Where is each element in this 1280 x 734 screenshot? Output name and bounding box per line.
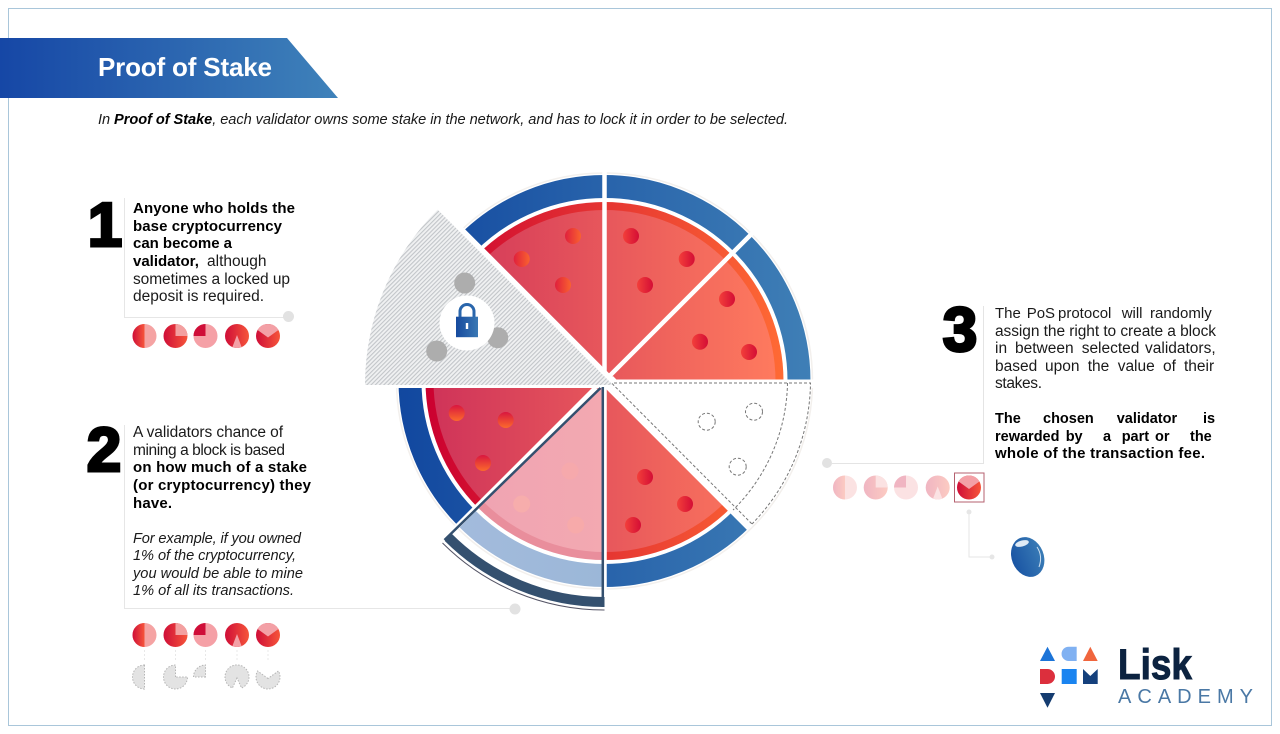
title banner: Proof of Stake xyxy=(98,52,272,82)
step 2 text: 1% of the cryptocurrency, xyxy=(133,548,296,564)
step 3 text: between xyxy=(1015,340,1074,357)
step 1 text: sometimes a locked up xyxy=(133,271,290,288)
selected slice outline xyxy=(442,387,604,610)
logo xyxy=(1040,641,1253,708)
step 2 text: have. xyxy=(133,495,172,512)
step 2 leader line xyxy=(124,425,510,608)
step 1 text xyxy=(133,200,295,305)
step 3 text: validator xyxy=(1117,411,1177,427)
slice: selected pink xyxy=(478,381,604,560)
dashed empty slice xyxy=(612,383,810,524)
step 3 text: or xyxy=(1155,429,1170,445)
title banner xyxy=(0,38,338,98)
step 2 text: you would be able to mine xyxy=(132,566,303,582)
step 2 text: A validators chance of xyxy=(133,424,284,441)
connectors between icon rows xyxy=(144,650,268,662)
step 3 text: The xyxy=(995,411,1021,427)
logo mark xyxy=(1040,647,1098,708)
chosen validator highlight xyxy=(954,473,984,502)
step 3 text: of xyxy=(1163,358,1177,375)
slice: top right xyxy=(604,202,731,381)
step 2 text xyxy=(132,424,312,599)
slice: lower left xyxy=(426,381,604,508)
step 2 text: on how much of a stake xyxy=(133,459,307,476)
step 3 text: chosen xyxy=(1043,411,1094,427)
step 3 number: 3 xyxy=(943,296,977,365)
step 2 text: 1% of all its transactions. xyxy=(133,583,294,599)
logo wordmark: Lisk xyxy=(1118,641,1192,689)
step 3 text: protocol xyxy=(1058,305,1111,322)
step 3 text: will xyxy=(1121,305,1143,322)
slice: right xyxy=(604,254,784,381)
step 2 leader dot xyxy=(510,604,520,614)
step 1 text: can become a xyxy=(133,235,233,252)
step 3 text: PoS xyxy=(1027,305,1055,322)
step 3 text: the xyxy=(1190,429,1212,445)
step 1 number: 1 xyxy=(88,191,122,260)
step 3 text: based xyxy=(995,358,1037,375)
step 3 text: is xyxy=(1203,411,1215,427)
step 1 xyxy=(88,191,295,348)
step 3 xyxy=(822,296,1216,582)
slice: bottom right xyxy=(604,381,731,560)
step 3 faded pie icons xyxy=(833,476,950,500)
step 1 text: deposit is required. xyxy=(133,288,264,305)
intro sentence: In Proof of Stake, each validator owns some stake in the network, and has to lock it in order to be selected. xyxy=(98,112,788,128)
step 1 text: base cryptocurrency xyxy=(133,218,283,235)
step 2 text: (or cryptocurrency) they xyxy=(133,477,312,494)
slice dots xyxy=(449,228,757,534)
step 3 text: selected xyxy=(1082,340,1139,357)
step 1 text: Anyone who holds the xyxy=(133,200,295,217)
step 3 text: in xyxy=(995,340,1007,357)
step 3 text xyxy=(994,305,1216,462)
step 3 text: rewarded xyxy=(995,429,1059,445)
step 1 text: validator, xyxy=(133,253,199,270)
step 3 text: the xyxy=(1088,358,1109,375)
step 2 text: mining a block is based xyxy=(133,442,285,459)
step 3 text: validators, xyxy=(1145,340,1216,357)
slice gaps xyxy=(390,170,820,610)
step 3 leader dot xyxy=(822,458,832,468)
step 1 pie icons xyxy=(132,324,280,348)
step 3 text: whole of the transaction fee. xyxy=(994,445,1205,462)
step 3 text: part xyxy=(1122,429,1149,445)
pie chart xyxy=(365,170,820,610)
step 2 xyxy=(87,416,520,689)
outer blue ring segments xyxy=(410,186,799,576)
step 1 text: although xyxy=(207,253,266,270)
step 3 text: randomly xyxy=(1150,305,1212,322)
step 3 text: a xyxy=(1103,429,1112,445)
step 3 text: assign the right to create a block xyxy=(995,323,1216,340)
icon: blue reward coin xyxy=(1005,532,1050,582)
step 2 number: 2 xyxy=(87,416,121,485)
step 3 text: The xyxy=(995,305,1021,322)
icon: padlock xyxy=(456,305,478,337)
logo subtitle: ACADEMY xyxy=(1118,686,1253,708)
lock group xyxy=(426,272,508,362)
locked grey slice xyxy=(365,210,613,385)
step 2 text: For example, if you owned xyxy=(133,531,302,547)
step 3 text: stakes. xyxy=(995,375,1042,392)
step 1 leader line xyxy=(124,198,288,318)
connector to reward xyxy=(966,510,994,560)
step 1 leader dot xyxy=(283,311,294,322)
outer halo xyxy=(396,173,812,589)
step 3 text: upon xyxy=(1045,358,1079,375)
step 2 pie icons xyxy=(132,623,280,647)
slice: top left xyxy=(478,202,604,381)
step 3 text: value xyxy=(1118,358,1155,375)
step 3 leader line xyxy=(832,306,984,464)
step 3 text: by xyxy=(1066,429,1083,445)
step 2 missing stake icons xyxy=(132,665,280,689)
step 3 text: their xyxy=(1184,358,1214,375)
